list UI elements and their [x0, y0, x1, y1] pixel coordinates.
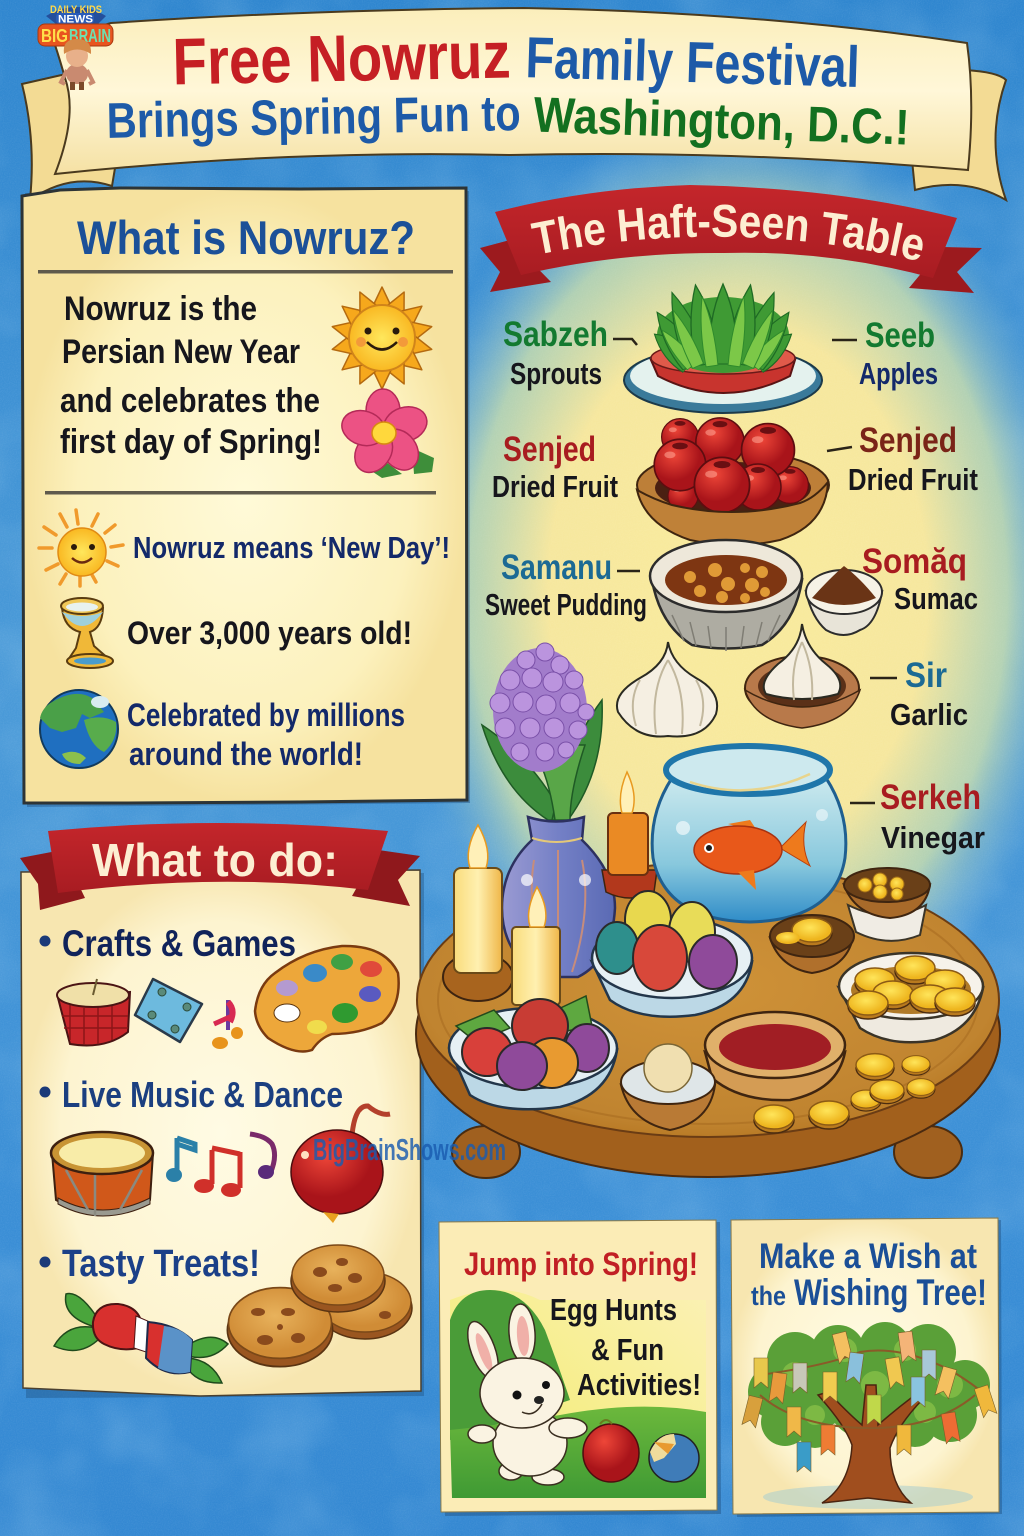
- logo: Daily Kids News Big Brain: BRAIN: [69, 26, 111, 46]
- heading: the: [751, 1281, 786, 1311]
- logo: Daily Kids News Big Brain: DAILY KIDS: [50, 4, 102, 16]
- live music: [40, 1074, 390, 1223]
- heading: What to do:: [92, 834, 338, 886]
- label: Sir: Garlic: [890, 697, 968, 732]
- trunk: [818, 1385, 922, 1503]
- label: Sabzeh: [503, 315, 608, 391]
- table top: [417, 863, 999, 1137]
- fact: reach: [40, 690, 405, 772]
- white coin bowl: [839, 953, 983, 1042]
- fact: reach: around the world!: [129, 736, 363, 772]
- panel: What to do: [20, 823, 424, 1398]
- small garlic bowl: [621, 1044, 715, 1130]
- icon: music notes: [166, 1134, 275, 1197]
- left ribbon tail: [22, 60, 120, 200]
- text: activities: [550, 1292, 701, 1402]
- tall candle: [443, 825, 513, 1001]
- label: Somaq: [862, 542, 978, 616]
- parchment: [439, 1220, 717, 1512]
- meadow scene: [450, 1290, 706, 1498]
- intro text: first day of Spring!: [60, 423, 322, 461]
- panel: What is Nowruz?: [22, 188, 470, 807]
- icon: blue egg: [649, 1434, 699, 1482]
- fact: age: Over 3,000 years old!: [127, 615, 412, 651]
- icon: bunny: [461, 1303, 587, 1485]
- icon: red apple instrument: [291, 1106, 390, 1223]
- short candle: [512, 887, 560, 1005]
- sumac bowl: [806, 566, 882, 635]
- fact: age: [61, 598, 412, 668]
- treats: Tasty Treats!: [62, 1243, 260, 1285]
- fact: reach: Celebrated by millions: [127, 697, 405, 733]
- icon: cookies: [227, 1245, 412, 1367]
- icon: small sun: [39, 510, 123, 586]
- garlic bulb: [617, 642, 717, 737]
- title line 2: [106, 85, 910, 156]
- label: Somaq: Sumac: [894, 581, 978, 616]
- intro text: Persian New Year: [62, 333, 300, 371]
- garlic in bowl: [745, 624, 860, 728]
- panel: Wishing Tree: [731, 1218, 1002, 1517]
- fruit bowl: [449, 996, 617, 1109]
- parchment: [21, 870, 421, 1396]
- logo: Daily Kids News Big Brain: [38, 4, 113, 90]
- red grain bowl: [705, 1012, 845, 1100]
- logo: Daily Kids News Big Brain: NEWS: [58, 14, 93, 26]
- label: Seeb: [859, 316, 938, 391]
- brown coin bowl: [770, 915, 854, 973]
- parchment: [731, 1218, 999, 1514]
- ribbon body: [55, 8, 971, 174]
- heading: [751, 1237, 987, 1313]
- label: Senjed left: Senjed: [503, 430, 596, 469]
- grass: [450, 1407, 706, 1498]
- gold coins: [754, 1054, 935, 1133]
- title line 2: Brings Spring Fun to: [106, 85, 521, 149]
- table legs: [452, 1126, 962, 1178]
- right small stacked bowl: [844, 868, 930, 941]
- label: Serkeh: Serkeh: [880, 778, 981, 817]
- tree: [742, 1322, 997, 1509]
- icon: small music note: [212, 1000, 243, 1049]
- title line 2: Washington, D.C.!: [533, 87, 910, 156]
- label: Senjed right: Dried Fruit: [848, 462, 978, 497]
- heading: Make a Wish at: [759, 1237, 977, 1276]
- red ribbon: [20, 823, 420, 910]
- ribbon: The Haft-Seen Table: The Haft-Seen Table: [530, 204, 923, 260]
- wish ribbons: [742, 1331, 997, 1472]
- icon: goblet hourglass: [61, 598, 113, 668]
- icon: wrapped candy: [54, 1294, 228, 1383]
- intro text: Nowruz is the: [64, 290, 257, 328]
- heading: Jump into Spring!: [464, 1246, 698, 1282]
- vase: [502, 817, 615, 977]
- table with items: [416, 643, 1000, 1178]
- crafts: Crafts & Games: [62, 923, 296, 964]
- title line 1: Family Festival: [525, 25, 860, 100]
- egg bowl: [592, 891, 752, 1017]
- parchment: [22, 188, 467, 803]
- label: Sir: Sir: [905, 656, 947, 695]
- label: Senjed left: [492, 430, 618, 504]
- title line 1: Free Nowruz: [172, 17, 511, 98]
- fish bowl: [652, 746, 846, 922]
- label: Serkeh: [880, 778, 985, 855]
- logo: Daily Kids News Big Brain: BIG: [41, 26, 68, 46]
- treats: [40, 1243, 412, 1383]
- right ribbon tail: [912, 70, 1006, 200]
- fact: new day: [39, 510, 450, 586]
- orange candle: [602, 772, 657, 898]
- hyacinth leaves: [482, 700, 602, 820]
- title line 1: [172, 17, 860, 100]
- icon: pink flower: [337, 389, 434, 480]
- label: Serkeh: Vinegar: [881, 820, 985, 855]
- icon: red egg: [583, 1420, 639, 1482]
- label: Sabzeh: Sprouts: [510, 356, 602, 391]
- label: Somaq: Somăq: [862, 542, 967, 581]
- label: Sir: [890, 656, 968, 732]
- label: Senjed right: Senjed: [859, 421, 957, 460]
- sabzeh sprouts on plate: [624, 283, 822, 413]
- apple bowl: [637, 418, 829, 545]
- text: activities: & Fun: [591, 1332, 664, 1367]
- title banner: [22, 8, 1006, 200]
- table base: [416, 891, 1000, 1177]
- fact: new day: Nowruz means ‘New Day’!: [133, 530, 450, 565]
- intro text: and celebrates the: [60, 382, 320, 420]
- icon: dice: [135, 979, 202, 1042]
- label: Senjed right: [848, 421, 978, 497]
- goldfish: [694, 820, 810, 890]
- label: Senjed left: Dried Fruit: [492, 469, 618, 504]
- panel: Jump into Spring: [439, 1220, 721, 1516]
- watermark: BigBrainShows.com: [313, 1132, 506, 1167]
- samanu bowl: [650, 540, 802, 651]
- text: activities: Egg Hunts: [550, 1292, 677, 1327]
- label: Seeb: Apples: [859, 356, 938, 391]
- icon: sun: [330, 287, 434, 389]
- label: Samanu: [485, 548, 647, 622]
- haft-seen labels: [485, 315, 985, 855]
- label: Sabzeh: Sabzeh: [503, 315, 608, 354]
- bush: [450, 1290, 570, 1440]
- ribbon: The Haft-Seen Table: [480, 185, 982, 293]
- label: Seeb: Seeb: [865, 316, 935, 355]
- live music: Live Music & Dance: [62, 1074, 343, 1115]
- crown: [748, 1322, 990, 1448]
- crafts: [40, 923, 399, 1052]
- hyacinth flowers: [490, 643, 594, 772]
- icon: palette: [255, 946, 399, 1052]
- label: Samanu: Sweet Pudding: [485, 587, 647, 622]
- mascot: [61, 39, 93, 90]
- text: activities: Activities!: [577, 1367, 701, 1402]
- heading: What is Nowruz?: [77, 211, 415, 264]
- icon: basket drum: [57, 979, 130, 1046]
- intro text: [60, 290, 322, 461]
- icon: globe: [40, 690, 118, 768]
- icon: drum: [51, 1132, 153, 1216]
- label: Samanu: Samanu: [501, 548, 612, 587]
